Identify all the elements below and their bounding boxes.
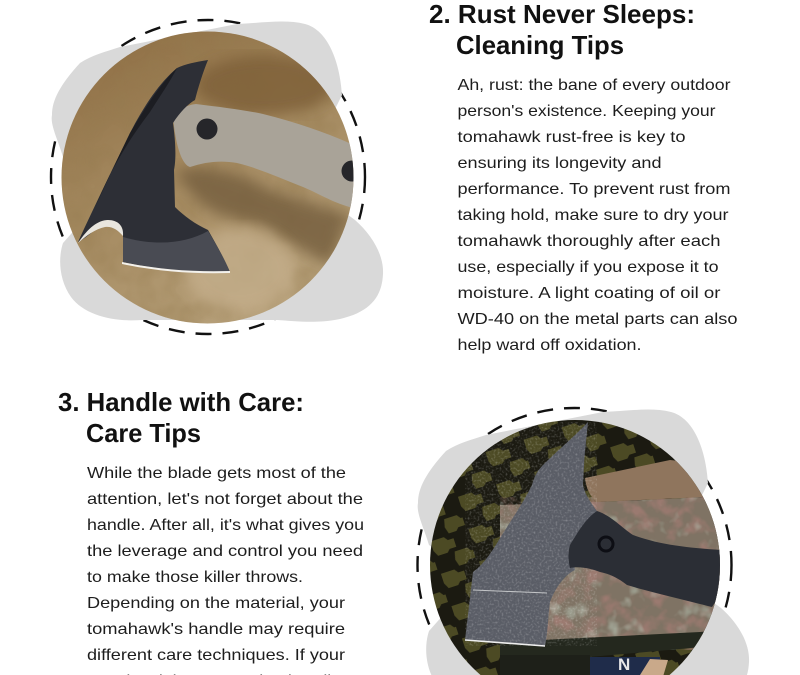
blade white edge bbox=[78, 220, 123, 243]
section 2 body text: taking hold, make sure to dry your bbox=[458, 207, 729, 224]
blade bbox=[78, 60, 230, 272]
section 2 body text: tomahawk rust-free is key to bbox=[458, 129, 686, 146]
section 3 body text: to make those killer throws. bbox=[87, 569, 303, 586]
section 3 body text: handle. After all, it's what gives you bbox=[87, 517, 364, 534]
section 2 body text: performance. To prevent rust from bbox=[458, 181, 730, 198]
dashed ring 2 bbox=[418, 408, 732, 675]
section 3 body text: While the blade gets most of the bbox=[87, 465, 346, 482]
section 2 body text bbox=[458, 77, 738, 354]
section 2 body text: WD-40 on the metal parts can also bbox=[458, 311, 738, 328]
section 3 heading bbox=[58, 387, 304, 448]
section 3 body text: attention, let's not forget about the bbox=[87, 491, 363, 508]
section 2 heading bbox=[429, 0, 695, 60]
section 3 heading: Care Tips bbox=[86, 418, 201, 448]
gray blob 1 bbox=[52, 22, 383, 322]
image group: rust cleaning tomahawk photo bbox=[51, 20, 383, 334]
section 3 body text: different care techniques. If your bbox=[87, 647, 346, 664]
photo 2: tomahawk on rusty metal bbox=[428, 418, 725, 675]
section 2 heading: Cleaning Tips bbox=[456, 30, 624, 60]
section 2 body text: Ah, rust: the bane of every outdoor bbox=[458, 77, 731, 94]
section 3 body text bbox=[87, 465, 364, 675]
blue label with N bbox=[590, 657, 660, 675]
handle bolt bbox=[599, 537, 613, 551]
section 2 body text: ensuring its longevity and bbox=[458, 155, 662, 172]
handle screws bbox=[196, 118, 218, 140]
photo 2: tomahawk on rusty metal: N bbox=[618, 655, 630, 674]
section 3 heading: 3. Handle with Care: bbox=[58, 387, 304, 417]
axe head bbox=[465, 422, 597, 646]
wood block bbox=[585, 460, 704, 502]
image group: handle care tomahawk photo bbox=[418, 408, 749, 675]
dashed ring 1 bbox=[51, 20, 365, 334]
axe handle bbox=[568, 511, 722, 607]
section 2 body text: help ward off oxidation. bbox=[458, 337, 642, 354]
rusty metal plate bbox=[500, 497, 725, 650]
dark strip below plate bbox=[500, 632, 704, 657]
section 2 body text: moisture. A light coating of oil or bbox=[458, 285, 721, 302]
handle bbox=[173, 104, 356, 208]
section 2 body text: use, especially if you expose it to bbox=[458, 259, 719, 276]
section 3 body text: tomahawk's handle may require bbox=[87, 621, 345, 638]
photo 1: tomahawk on canvas bbox=[60, 30, 362, 326]
section 3 body text: Depending on the material, your bbox=[87, 595, 346, 612]
section 2 body text: person's existence. Keeping your bbox=[458, 103, 716, 120]
section 3 body text: the leverage and control you need bbox=[87, 543, 363, 560]
section 2 body text: tomahawk thoroughly after each bbox=[458, 233, 720, 250]
gray blob 2 bbox=[418, 410, 749, 675]
